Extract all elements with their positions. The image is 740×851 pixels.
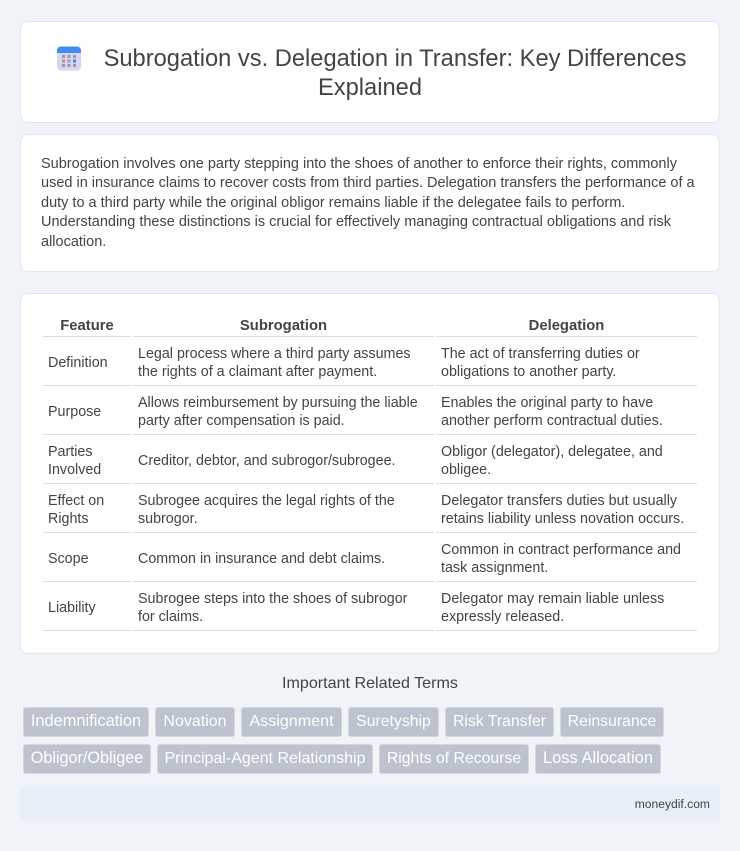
tag: Reinsurance [568, 713, 656, 730]
row: effect on rights [48, 493, 684, 527]
row: liability: expressly released. [441, 609, 564, 625]
table header: subrogation: Subrogation [240, 318, 327, 334]
tag [535, 744, 661, 774]
row: effect on rights: Subrogee acquires the legal rights of the [138, 493, 395, 509]
row: scope: Common in insurance and debt claims. [138, 551, 385, 567]
row: definition: Legal process where a third party assumes [138, 346, 411, 362]
row: liability: Subrogee steps into the shoes of subrogor [138, 591, 407, 607]
row: liability: for claims. [138, 609, 203, 625]
row: liability: Delegator may remain liable unless [441, 591, 664, 607]
panel: header [20, 21, 720, 123]
row: liability [48, 591, 664, 625]
title: Subrogation vs. Delegation in Transfer: Key Differences [104, 46, 686, 72]
tag [241, 707, 342, 737]
tag [379, 744, 529, 774]
row: scope: Scope [48, 551, 89, 567]
tag: Assignment [249, 712, 334, 730]
footer [20, 787, 720, 821]
row: purpose [48, 395, 663, 429]
row: liability: Liability [48, 600, 96, 616]
row: scope [48, 542, 681, 576]
tag: Novation [163, 713, 227, 730]
text block: summary [41, 156, 695, 250]
row: parties involved: Parties [48, 444, 92, 460]
tag: Principal-Agent Relationship [164, 750, 366, 767]
row: effect on rights: retains liability unless novation occurs. [441, 511, 684, 527]
tag: Obligor/Obligee [31, 749, 143, 767]
tag [23, 744, 151, 774]
row: purpose: Allows reimbursement by pursuing the liable [138, 395, 418, 411]
row: purpose: Purpose [48, 404, 101, 420]
row: scope: task assignment. [441, 560, 548, 576]
footer credit: moneydif.com [635, 797, 710, 811]
tag [155, 707, 235, 737]
row: purpose: Enables the original party to have [441, 395, 653, 411]
table header: feature: Feature [60, 318, 114, 334]
title [104, 46, 686, 101]
row: definition: The act of transferring duties or [441, 346, 640, 362]
tag: Suretyship [356, 713, 431, 730]
text block: summary: Subrogation involves one party stepping into the shoes of another to enforce their rights, commonly [41, 156, 677, 172]
tag: Indemnification [31, 712, 141, 730]
panel: comparison table [20, 293, 720, 654]
tag: Rights of Recourse [387, 750, 521, 767]
tag [157, 744, 373, 774]
row: effect on rights: Delegator transfers duties but usually [441, 493, 677, 509]
table header: delegation: Delegation [529, 318, 604, 334]
row: parties involved: obligee. [441, 462, 491, 478]
tag: Loss Allocation [543, 749, 653, 767]
row: definition [48, 346, 640, 380]
row: effect on rights: Effect on [48, 493, 104, 509]
row: definition: Definition [48, 354, 108, 370]
text block: summary: Understanding these distinctions is crucial for effectively managing contractual obligations and risk [41, 214, 671, 230]
tag [23, 707, 149, 737]
tag [348, 707, 439, 737]
tag group: related terms [23, 707, 664, 774]
text block: summary: used in insurance claims to recover costs from third parties. Delegation transfers the performance of a [41, 175, 695, 191]
row: effect on rights: subrogor. [138, 511, 198, 527]
row: parties involved: Creditor, debtor, and subrogor/subrogee. [138, 453, 396, 469]
row: definition: obligations to another party. [441, 364, 616, 380]
row: parties involved: Involved [48, 462, 101, 478]
row: scope: Common in contract performance and [441, 542, 681, 558]
row: purpose: another perform contractual duties. [441, 413, 663, 429]
title: Explained [318, 75, 422, 101]
row: parties involved: Obligor (delegator), delegatee, and [441, 444, 663, 460]
row: definition: the rights of a claimant after payment. [138, 364, 377, 380]
text block: summary: duty to a third party while the original obligor remains liable if the delegatee fails to perform. [41, 194, 625, 210]
text block: summary: allocation. [41, 234, 106, 250]
icon: calendar [57, 46, 81, 70]
panel: summary paragraph [20, 134, 720, 272]
row: parties involved [48, 444, 663, 478]
heading: related terms: Important Related Terms [282, 674, 458, 692]
row: purpose: party after compensation is paid. [138, 413, 345, 429]
tag: Risk Transfer [453, 713, 546, 730]
tag [445, 707, 554, 737]
row: effect on rights: Rights [48, 511, 89, 527]
tag [560, 707, 664, 737]
